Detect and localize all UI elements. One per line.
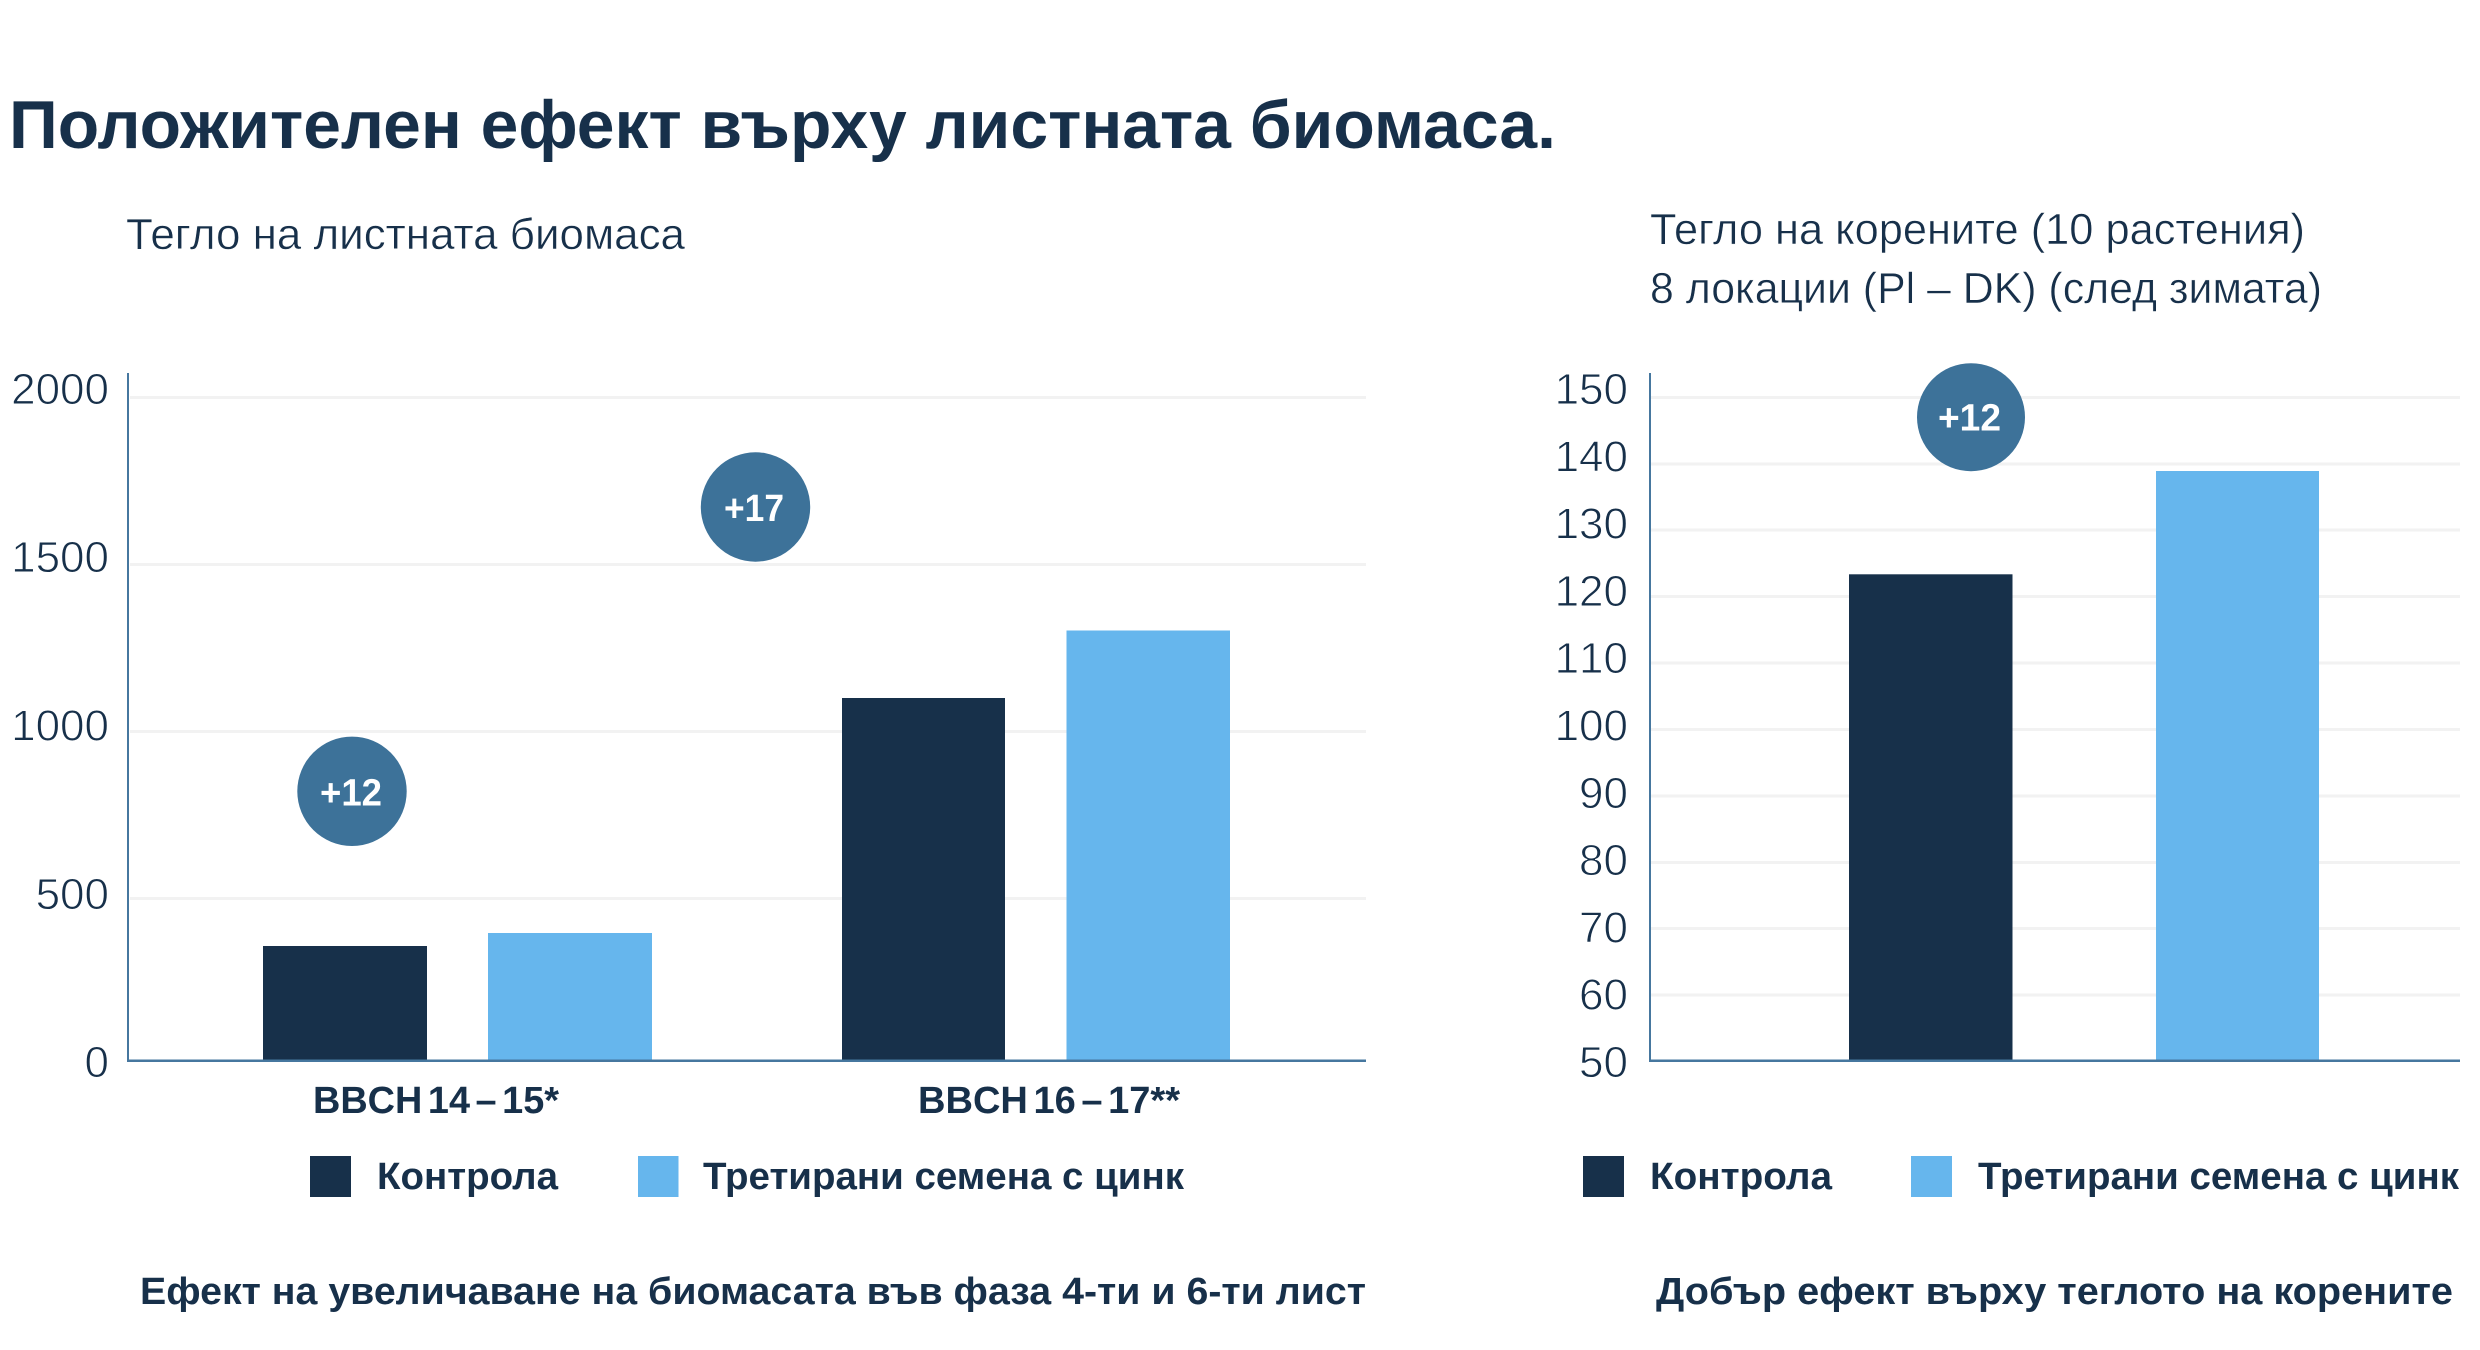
- bar chart: root weight: [1849, 471, 2319, 1060]
- y axis labels: root weight: 150: [1555, 365, 1628, 414]
- y axis labels: root weight: 110: [1555, 634, 1628, 683]
- chart subtitle: leaf biomass weight: Тегло на листната биомаса: [126, 210, 686, 259]
- panel: leaf biomass chart: [11, 210, 1366, 1313]
- y axis labels: root weight: [1555, 365, 1628, 1087]
- badge: +17 later stage: +17: [724, 488, 784, 530]
- badge: +17 later stage: [701, 452, 810, 562]
- axes: root weight: [1649, 373, 2460, 1062]
- x axis label: BBCH 14-15: BBCH 14 – 15*: [313, 1080, 559, 1122]
- axes: leaf biomass: [127, 373, 1366, 1062]
- y axis labels: leaf biomass: 0: [85, 1038, 109, 1087]
- y axis labels: root weight: 140: [1555, 432, 1628, 481]
- y axis labels: root weight: 100: [1555, 702, 1628, 750]
- chart subtitle: root weight: [1650, 205, 2322, 313]
- y axis labels: root weight: 50: [1579, 1038, 1628, 1087]
- legend: root weight: Третирани семена с цинк: [1978, 1156, 2460, 1198]
- y axis labels: leaf biomass: 2000: [11, 365, 109, 414]
- title: Положителен ефект върху листната биомаса.: [9, 87, 1556, 163]
- y axis labels: root weight: 120: [1555, 567, 1628, 616]
- chart subtitle: root weight: Тегло на корените (10 растения): [1650, 205, 2305, 254]
- badge: +12 root weight: [1917, 363, 2025, 471]
- legend: leaf biomass: [310, 1156, 1185, 1198]
- legend: leaf biomass: Контрола: [377, 1156, 559, 1198]
- y axis labels: leaf biomass: 500: [36, 870, 109, 919]
- y axis labels: root weight: 80: [1579, 836, 1628, 885]
- caption: leaf biomass effect: Ефект на увеличаване на биомасата във фаза 4-ти и 6-ти лист: [140, 1271, 1366, 1313]
- y axis labels: root weight: 90: [1579, 769, 1628, 818]
- panel: root weight chart: [1555, 205, 2460, 1313]
- x axis label: BBCH 16-17: BBCH 16 – 17**: [918, 1080, 1180, 1122]
- legend: leaf biomass: Третирани семена с цинк: [703, 1156, 1185, 1198]
- y axis labels: leaf biomass: 1500: [11, 533, 109, 582]
- y axis labels: leaf biomass: [11, 365, 109, 1087]
- y axis labels: root weight: 60: [1579, 971, 1628, 1020]
- badge: +12 root weight: +12: [1938, 398, 2001, 440]
- chart subtitle: root weight: 8 локации (Pl – DK) (след зимата): [1650, 264, 2322, 313]
- y axis labels: leaf biomass: 1000: [11, 702, 109, 750]
- legend: root weight: Контрола: [1650, 1156, 1833, 1198]
- y axis labels: root weight: 130: [1555, 500, 1628, 549]
- badge: +12 early stage: +12: [320, 773, 382, 815]
- bar chart: leaf biomass: [263, 630, 1230, 1060]
- caption: root weight effect: Добър ефект върху теглото на корените: [1656, 1271, 2453, 1313]
- legend: root weight: [1583, 1156, 2460, 1198]
- y axis labels: root weight: 70: [1579, 903, 1628, 952]
- badge: +12 early stage: [297, 737, 407, 846]
